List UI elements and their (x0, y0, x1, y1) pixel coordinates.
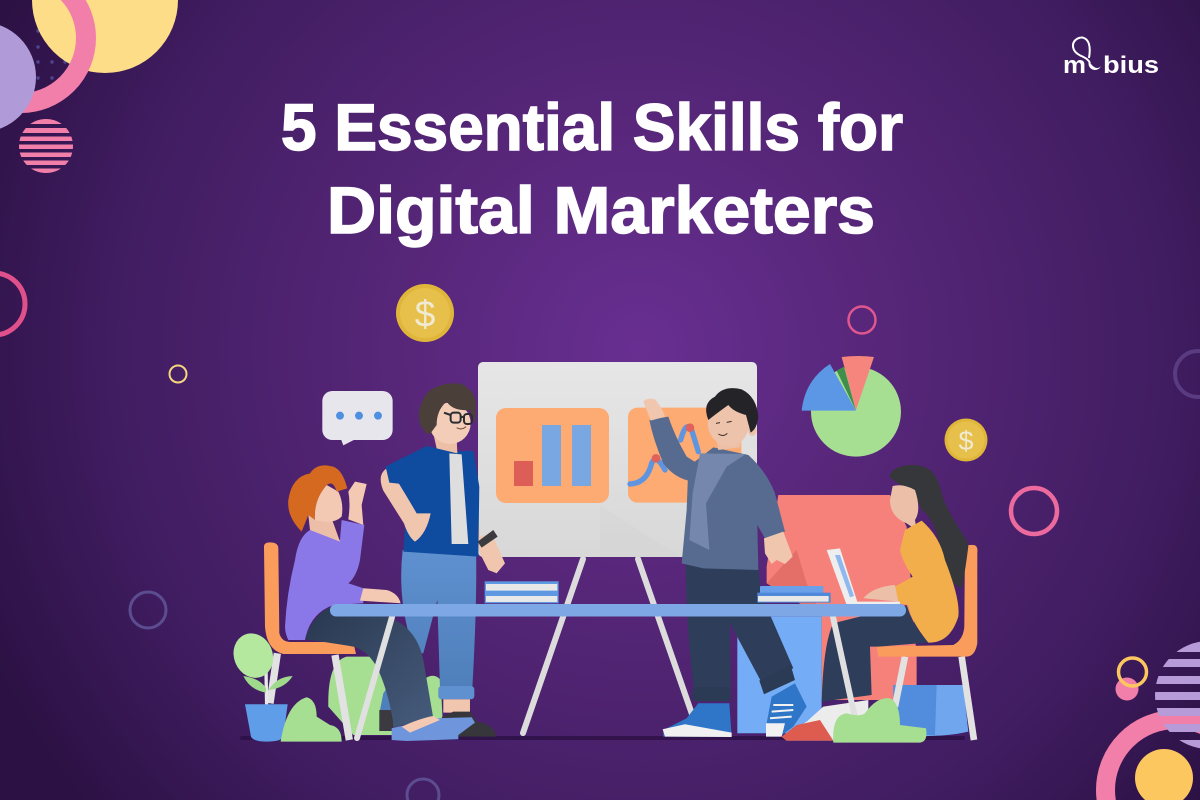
neck and head (717, 435, 742, 450)
cuffs (693, 687, 731, 701)
green bush behind left woman (328, 657, 443, 735)
icon: dollar coin small (944, 418, 988, 462)
logo: mobius (1063, 38, 1159, 79)
left arm with hand on hip (381, 468, 431, 542)
icon: pie chart (802, 356, 901, 457)
laptop (827, 548, 900, 605)
cuff (438, 686, 474, 699)
shoe (442, 712, 496, 737)
left shoe (663, 703, 732, 737)
books on table right (757, 586, 831, 603)
title (281, 90, 903, 247)
shirt (386, 446, 479, 557)
line chart panel (628, 408, 741, 503)
table (330, 604, 906, 738)
t-shirt (449, 453, 468, 544)
right shoe (767, 683, 807, 737)
bush front right (833, 698, 926, 743)
logo: mobius: bius (1103, 52, 1159, 79)
trousers (304, 607, 433, 727)
furniture: blue cylinder and box (737, 617, 968, 736)
watch (478, 530, 498, 548)
hair (288, 465, 347, 532)
decorative shapes: bottom right (1106, 641, 1200, 800)
title line 2: Digital Marketers (327, 173, 875, 247)
decorative shapes: top left (0, 0, 178, 174)
back shoe and leg (379, 660, 407, 731)
potted plant (227, 627, 293, 742)
lower hand (764, 532, 793, 564)
jacket (682, 447, 785, 570)
neck and head (433, 433, 457, 453)
man presenting (643, 388, 807, 737)
resting hand (360, 588, 401, 603)
sweater (895, 521, 959, 643)
hair (889, 465, 968, 588)
flats (392, 717, 475, 741)
raised hand (348, 482, 367, 525)
left chair (264, 542, 356, 740)
title line 1: 5 Essential Skills for (281, 90, 903, 164)
woman seated left (285, 465, 475, 741)
woman with laptop (782, 465, 977, 741)
sneakers (782, 700, 868, 741)
trousers (686, 557, 793, 690)
raised arm (649, 417, 697, 481)
bar chart panel (496, 408, 609, 503)
neck and head (308, 515, 340, 542)
books on table left (485, 581, 559, 603)
decorative rings (0, 273, 1200, 800)
glasses (444, 413, 472, 424)
icon: dollar coin small: $ (958, 426, 974, 456)
furniture: red backdrop (767, 495, 917, 700)
jeans (401, 547, 476, 688)
hand (863, 585, 898, 602)
right arm (475, 493, 505, 573)
whiteboard (478, 362, 757, 557)
hair (706, 388, 758, 433)
top (285, 520, 364, 640)
face (890, 485, 918, 530)
logo: mobius: m (1063, 52, 1086, 79)
man with glasses (379, 383, 505, 737)
icon: dollar coin large (396, 284, 454, 342)
ground shadow (240, 736, 965, 740)
trousers (822, 605, 928, 702)
whiteboard legs (523, 559, 693, 733)
shirt (689, 453, 746, 550)
hair (419, 383, 476, 435)
icon: dollar coin large: $ (415, 294, 435, 334)
bush front left (281, 697, 342, 742)
speech bubble (322, 391, 393, 445)
chair (895, 657, 974, 740)
